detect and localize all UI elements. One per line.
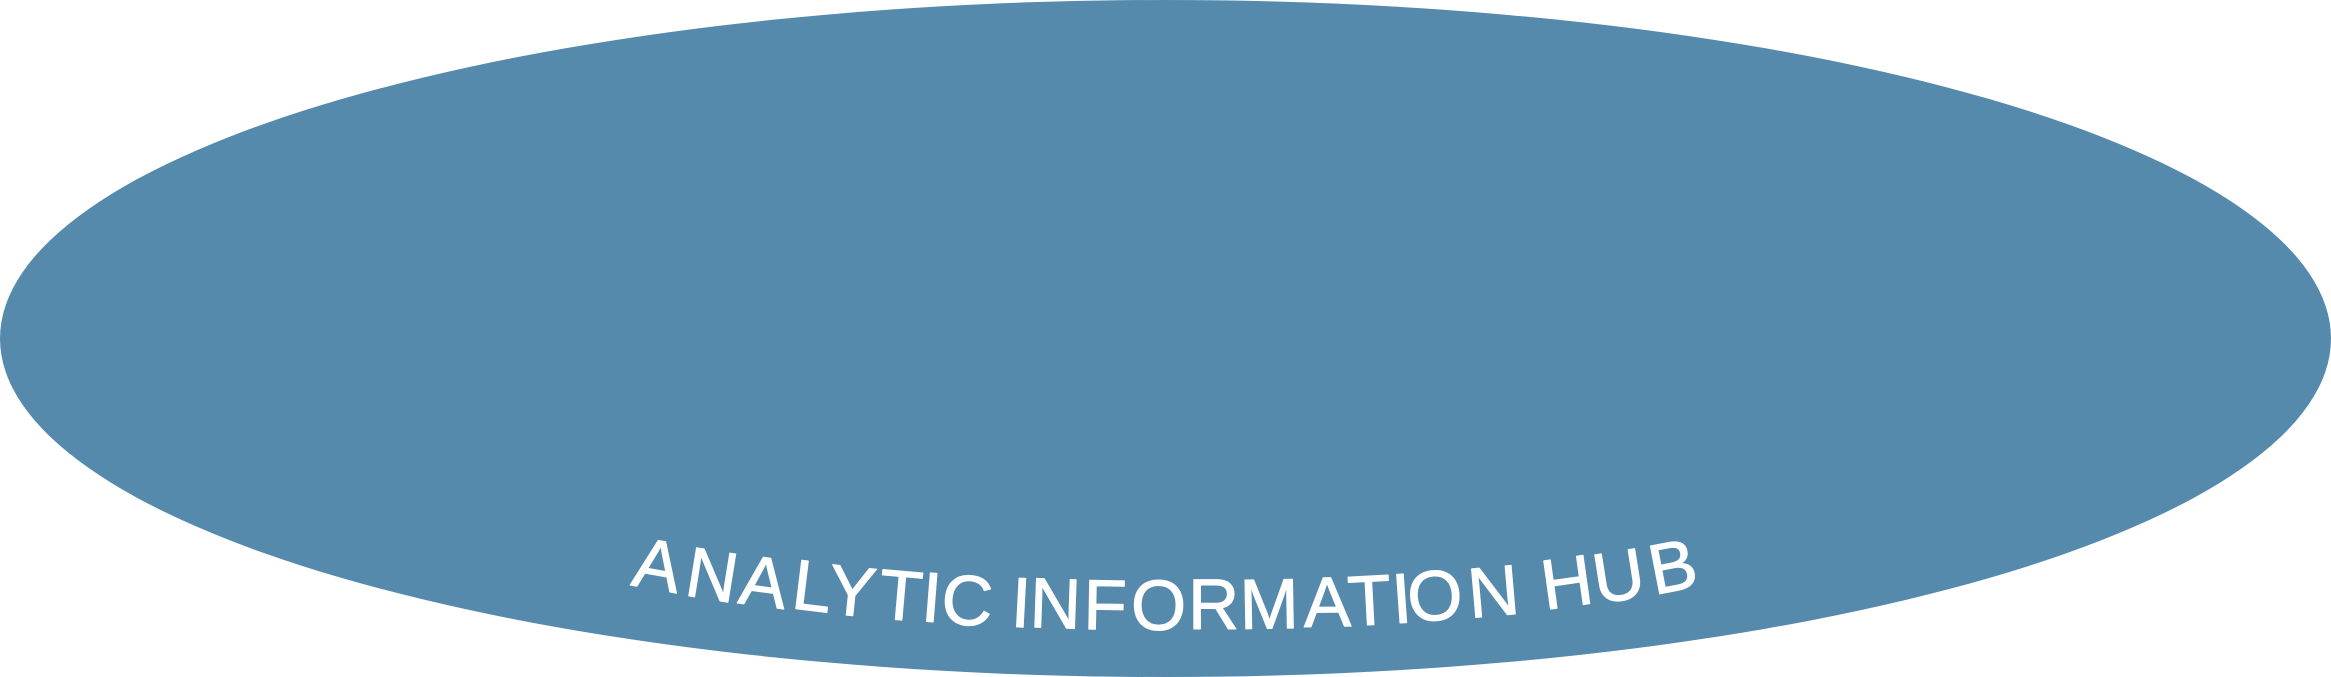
title: curved heading: ANALYTIC INFORMATION HUB: [627, 523, 1704, 646]
